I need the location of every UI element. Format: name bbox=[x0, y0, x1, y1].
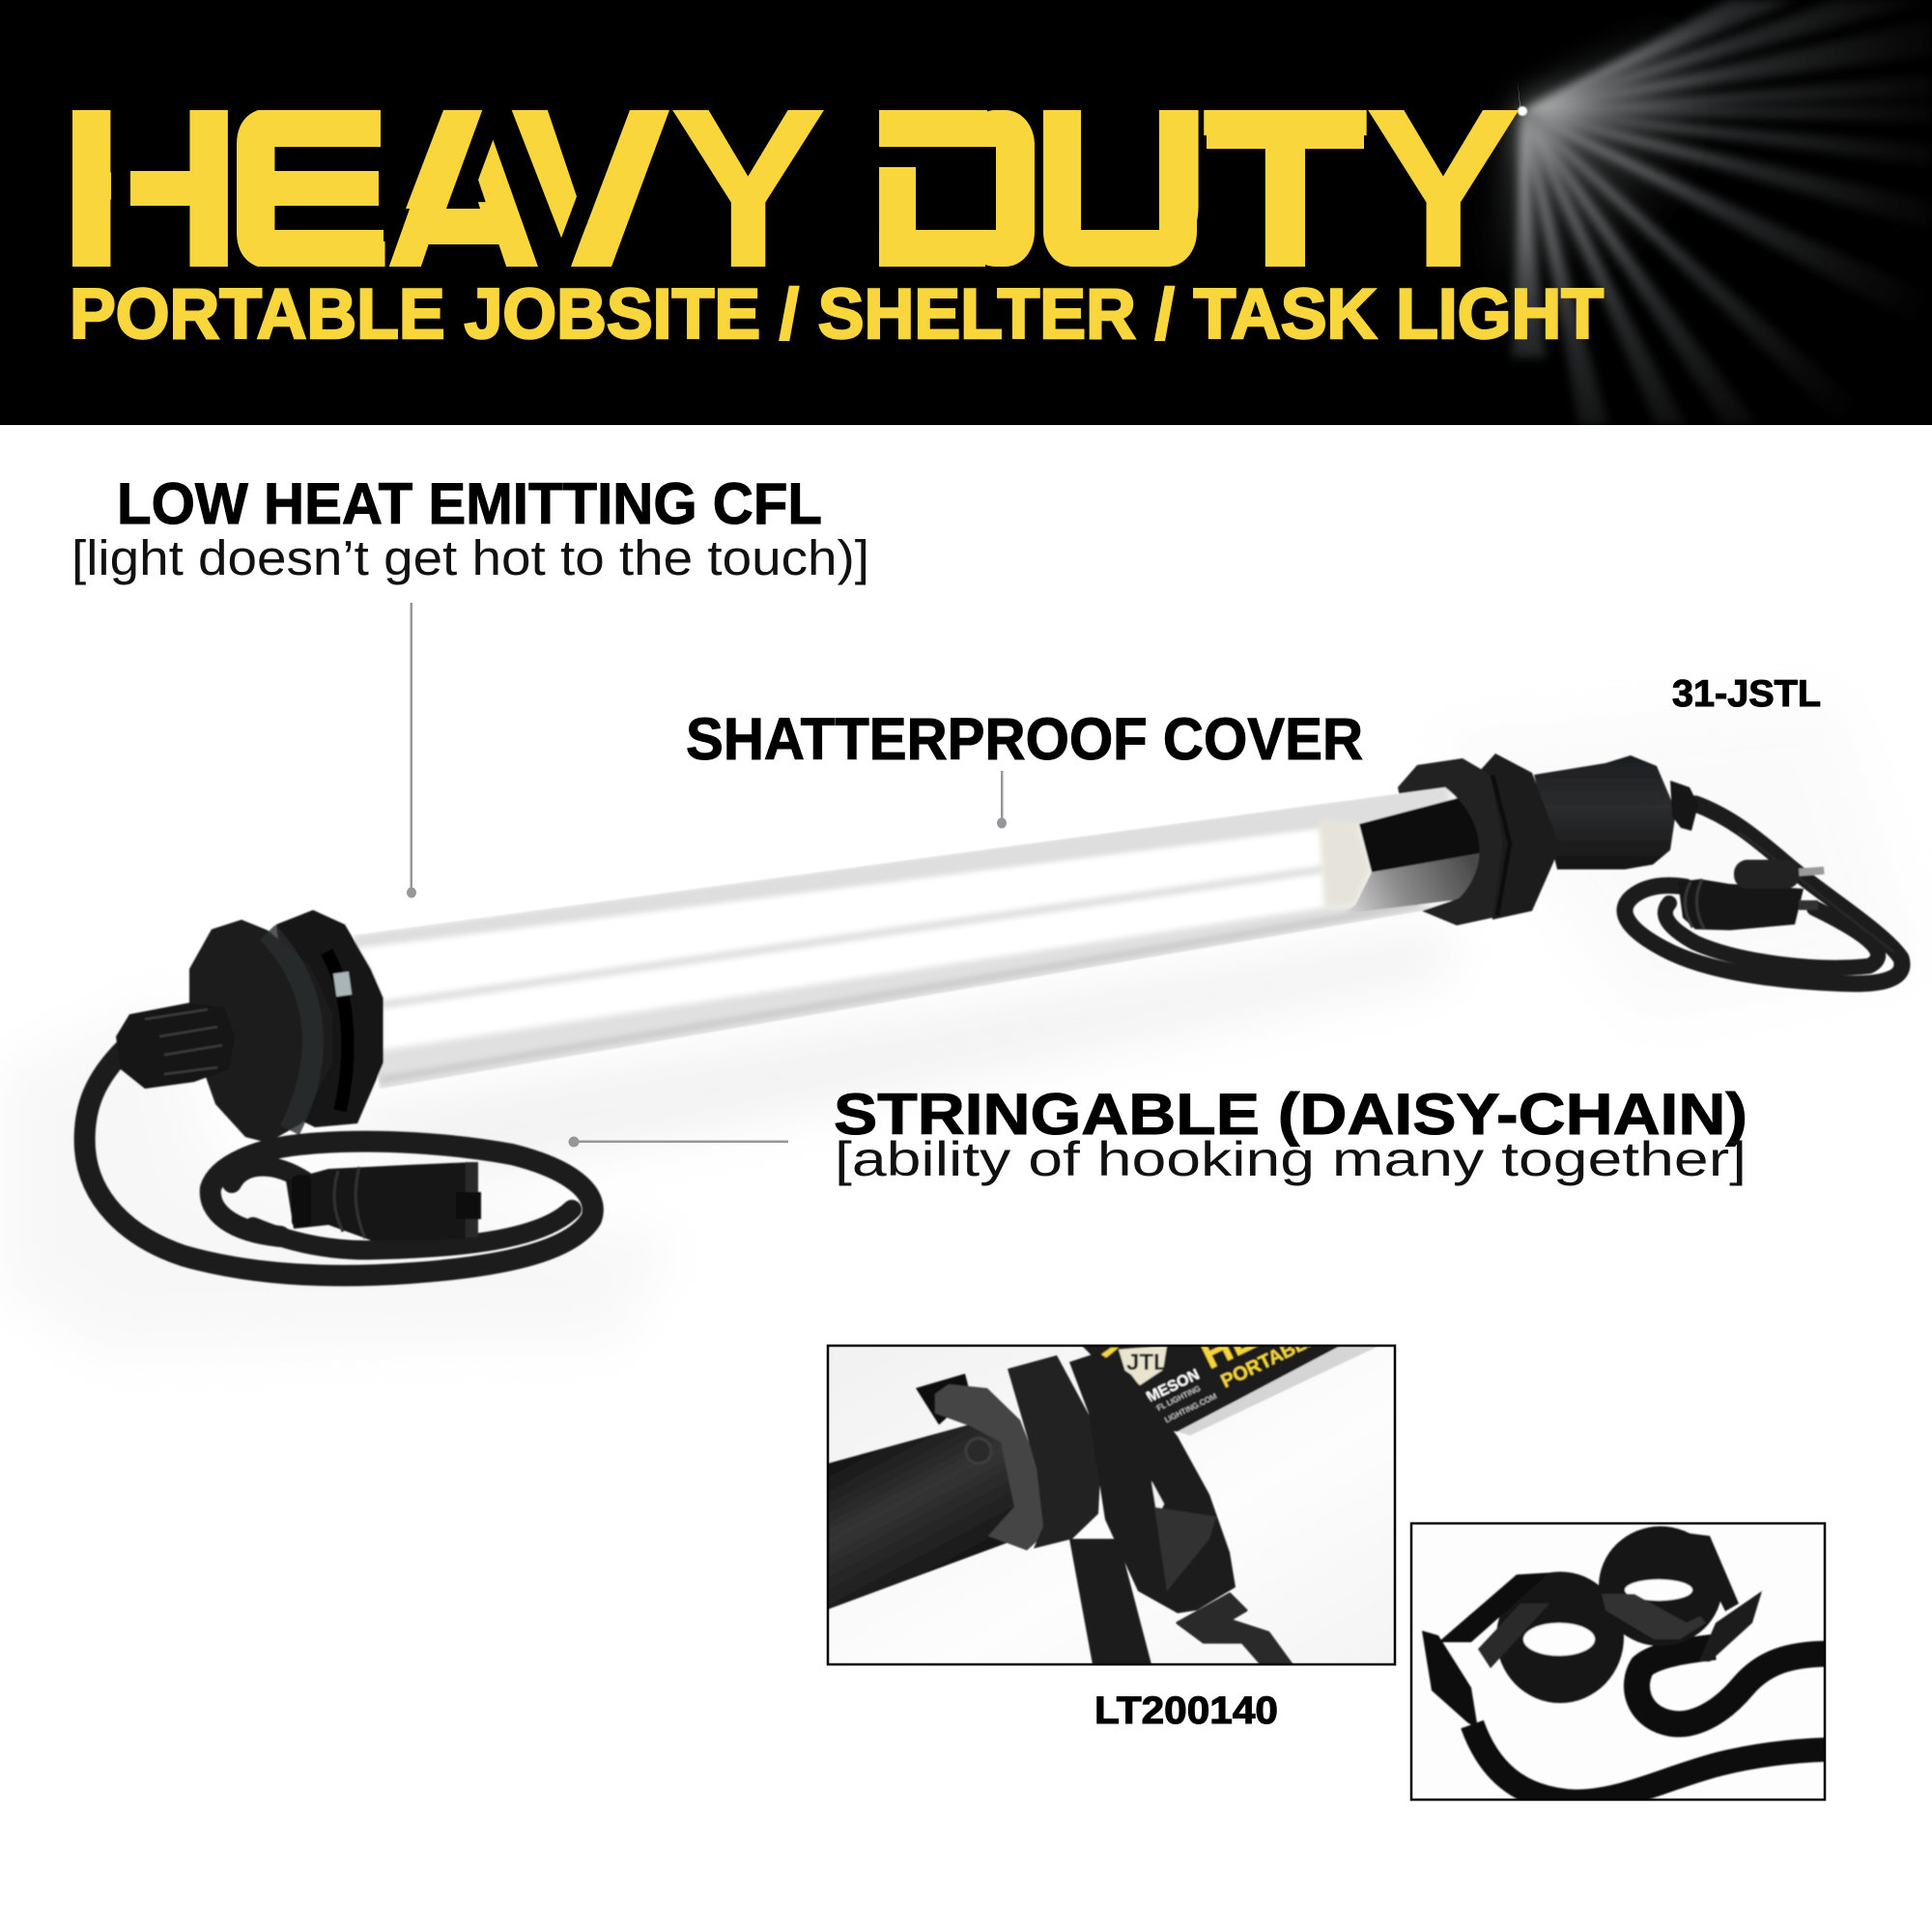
photo panel: coiled straps bbox=[1411, 1523, 1831, 1802]
label: model 31-JSTL: 31-JSTL bbox=[1672, 673, 1821, 715]
long strap bbox=[1069, 1352, 1236, 1613]
label: stringable bbox=[834, 1082, 1747, 1186]
title: HEAVY DUTY bbox=[55, 61, 1522, 316]
rear nut right bbox=[1478, 753, 1560, 920]
right plug bbox=[1678, 860, 1824, 930]
header banner bbox=[0, 0, 1932, 425]
label: stringable: STRINGABLE (DAISY-CHAIN) bbox=[834, 1082, 1747, 1147]
left cable bbox=[85, 1048, 593, 1276]
title: HEAVY DUTY: Y bbox=[1364, 62, 1522, 316]
right buckle bbox=[1699, 1591, 1762, 1662]
velcro tab bbox=[916, 1374, 971, 1425]
right coil bbox=[1599, 1526, 1722, 1646]
subtitle: PORTABLE JOBSITE / SHELTER / TASK LIGHT bbox=[70, 275, 1604, 354]
leader line: cover bbox=[997, 771, 1007, 829]
lamp end cap bbox=[1319, 819, 1372, 908]
flare bbox=[1518, 80, 1527, 116]
hook bbox=[1178, 1594, 1292, 1664]
sleeve lettering: MESON bbox=[1144, 1367, 1202, 1406]
sleeve lettering bbox=[1145, 1347, 1313, 1424]
knob bbox=[116, 1003, 235, 1089]
loop strap bbox=[1636, 1647, 1831, 1724]
label: stringable: [ability of hooking many together] bbox=[835, 1132, 1747, 1186]
right cable bbox=[1625, 804, 1902, 983]
product: tube light bbox=[85, 753, 1902, 1276]
label: shatterproof cover: SHATTERPROOF COVER bbox=[686, 706, 1363, 772]
leader line: CFL bbox=[407, 603, 416, 898]
photo panel: strap on light bbox=[828, 1312, 1395, 1664]
title: HEAVY DUTY: U bbox=[1026, 61, 1214, 315]
title stencil adjustments bbox=[111, 108, 1364, 274]
left coil bbox=[1496, 1572, 1624, 1703]
sleeve lettering: HE bbox=[1193, 1312, 1264, 1378]
connecting straps bbox=[1438, 1573, 1549, 1642]
label: low heat emitting CFL: LOW HEAT EMITTING CFL bbox=[117, 471, 822, 536]
front disk bbox=[189, 920, 332, 1143]
floor shadow bbox=[0, 696, 1922, 1352]
label: LT200140: LT200140 bbox=[1094, 1690, 1278, 1732]
light burst bbox=[1488, 0, 1932, 425]
title: HEAVY DUTY: A bbox=[384, 61, 544, 316]
title: HEAVY DUTY: H bbox=[55, 62, 245, 316]
hanging strap bbox=[1069, 1539, 1151, 1664]
sleeve lettering: CFL LIGHTING bbox=[1151, 1384, 1202, 1415]
flange bbox=[935, 1384, 1046, 1550]
glossy ring bbox=[327, 952, 352, 1111]
label: low heat emitting CFL bbox=[71, 471, 869, 585]
long strap bbox=[1472, 1724, 1831, 1802]
label sleeve bbox=[1082, 1346, 1341, 1432]
tube bbox=[354, 782, 1497, 1092]
buckle bbox=[1154, 1507, 1216, 1591]
sleeve lettering: -LIGHTING.COM bbox=[1161, 1392, 1218, 1426]
sleeve lettering: PORTABLE bbox=[1218, 1327, 1321, 1392]
rear nut left bbox=[276, 910, 384, 1127]
title: HEAVY DUTY: E bbox=[219, 62, 395, 316]
cylinder bbox=[828, 1424, 1024, 1609]
logo shield bbox=[1119, 1346, 1168, 1385]
end knob bbox=[1670, 781, 1698, 831]
title: HEAVY DUTY: Y bbox=[668, 61, 828, 316]
label: low heat emitting CFL: [light doesn’t get hot to the touch)] bbox=[71, 530, 869, 585]
leader line: stringable bbox=[568, 1136, 788, 1148]
logo shield: JTL bbox=[1126, 1350, 1168, 1376]
title: HEAVY DUTY: D bbox=[862, 61, 1046, 315]
front nut right bbox=[1398, 758, 1503, 925]
left buckle bbox=[1422, 1631, 1478, 1729]
end body bbox=[1534, 755, 1676, 869]
inner black section bbox=[1358, 797, 1480, 873]
title: HEAVY DUTY: V bbox=[510, 61, 669, 316]
title: HEAVY DUTY: T bbox=[1201, 61, 1370, 315]
wrap strap bbox=[1008, 1355, 1102, 1548]
left plug bbox=[286, 1162, 481, 1240]
